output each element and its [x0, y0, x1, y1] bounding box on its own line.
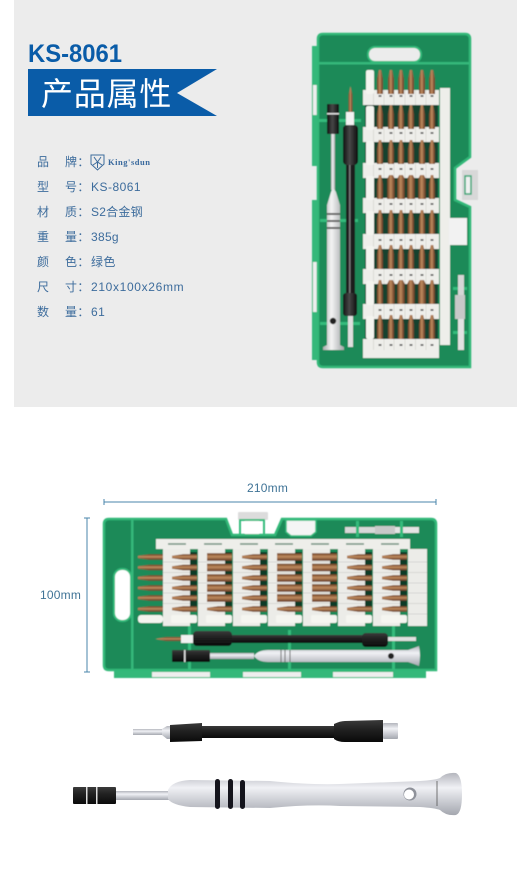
spare bit at top	[345, 521, 419, 537]
spec row: colour: 绿色	[91, 254, 116, 269]
spec row: brand: 品	[37, 155, 49, 169]
spec row: quantity	[37, 304, 105, 319]
spec row: quantity: 数	[37, 304, 49, 319]
product photo: open green case, vertical	[312, 34, 478, 367]
case handle cut-out	[368, 47, 421, 62]
spec row: brand	[37, 155, 150, 170]
spec row: model: 号：	[65, 180, 90, 194]
right holder strip	[440, 88, 450, 345]
loose tool: flexible shaft	[133, 720, 398, 742]
heading: ribbon banner: 产品属性	[41, 76, 172, 112]
case body	[104, 519, 436, 670]
dimension line: height 100mm	[40, 518, 90, 672]
case top divider	[319, 62, 469, 64]
spec row: quantity: 61	[91, 305, 105, 319]
flexible shaft in case	[343, 86, 358, 347]
grip rings	[215, 779, 245, 809]
screwdriver in case	[172, 646, 420, 666]
case left divider	[131, 520, 134, 670]
first column bits	[138, 554, 163, 623]
spec row: weight: 重	[37, 230, 49, 244]
spec row: brand: King'sdun	[108, 157, 150, 167]
icon: brand shield logo	[91, 155, 104, 170]
clasp	[449, 170, 478, 245]
spec row: material: 材	[37, 205, 49, 219]
bit holder dark bands	[365, 100, 438, 340]
green clips	[319, 119, 467, 334]
small spare bit on right	[455, 275, 465, 350]
spec row: material: 质：	[65, 205, 90, 219]
green clips	[188, 626, 395, 670]
dimension line: width 210mm: 210mm	[247, 481, 288, 495]
panel: grey product attributes background	[14, 0, 517, 407]
spec row: material: S2合金钢	[91, 204, 143, 219]
loose tool: precision screwdriver handle	[73, 773, 462, 815]
spec row: model: 型	[37, 180, 49, 194]
spec row: colour	[37, 254, 116, 269]
spec row: colour: 色：	[65, 255, 90, 269]
spec row: weight	[37, 230, 119, 244]
spec row: material	[37, 204, 143, 219]
title: model number: KS-8061	[28, 40, 122, 68]
spec row: weight: 量：	[65, 230, 90, 244]
dimension line: width 210mm	[104, 481, 436, 505]
spec row: weight: 385g	[91, 230, 119, 244]
bit holder strips	[363, 90, 439, 358]
spec row: dimensions: 210x100x26mm	[91, 280, 184, 294]
spec row: dimensions	[37, 280, 184, 294]
flexible shaft in case	[155, 631, 416, 647]
spec row: quantity: 量：	[65, 305, 90, 319]
spec row: dimensions: 寸：	[65, 280, 90, 294]
product photo: open green case, horizontal	[104, 512, 436, 678]
case side lip	[312, 46, 320, 360]
clasp	[238, 512, 316, 536]
bits, eight rows of six	[377, 70, 435, 339]
spec row: colour: 颜	[37, 254, 49, 269]
spec row: model	[37, 180, 141, 194]
top holder strip	[156, 539, 410, 549]
spec row: brand: 牌：	[65, 155, 90, 169]
spec row: dimensions: 尺	[37, 280, 49, 294]
dimension line: height 100mm: 100mm	[40, 588, 81, 602]
screwdriver handle in case	[323, 104, 344, 350]
spec row: model: KS-8061	[91, 180, 141, 194]
extension plugs	[366, 70, 374, 339]
handle hole	[404, 788, 416, 800]
bit holder columns	[163, 549, 427, 626]
heading: ribbon banner	[28, 69, 217, 116]
case body	[318, 34, 470, 367]
case bottom lip	[114, 670, 426, 678]
case handle cut-out	[114, 569, 131, 621]
